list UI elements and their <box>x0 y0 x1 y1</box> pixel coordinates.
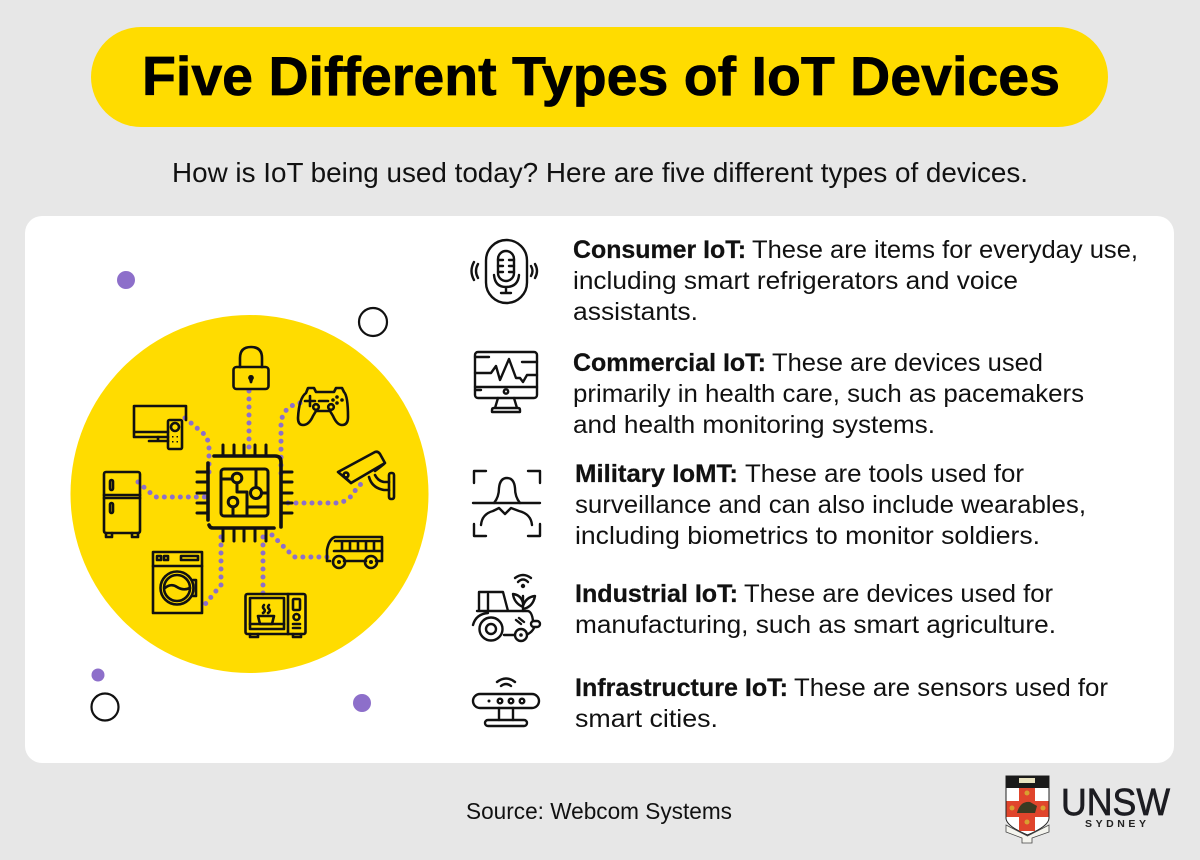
icon: refrigerator <box>104 472 140 537</box>
text: Consumer IoT <box>573 236 1138 326</box>
yellow circle <box>70 315 428 673</box>
item: Commercial IoT <box>475 349 1084 439</box>
decorative purple and outlined dots <box>92 271 387 720</box>
icon: smart tractor <box>473 575 540 641</box>
text: Military IoMT: Military IoMT: <box>575 460 738 488</box>
text: Infrastructure IoT: These are sensors used for <box>794 674 1108 702</box>
text: Industrial IoT: These are devices used for <box>744 580 1053 608</box>
item: Consumer IoT <box>472 236 1138 326</box>
icon: security camera <box>338 452 394 499</box>
text: Commercial IoT <box>573 349 1084 439</box>
title banner: Five Different Types of IoT Devices <box>142 45 1060 107</box>
text: Consumer IoT: assistants. <box>573 298 698 326</box>
logo: UNSW Sydney: UNSW <box>1061 782 1170 824</box>
icon: bus <box>327 537 382 568</box>
illustration: IoT chip network <box>70 271 428 720</box>
icon: microwave oven <box>246 594 306 637</box>
text: Consumer IoT: Consumer IoT: <box>573 236 746 264</box>
icon: television and remote <box>134 406 186 449</box>
item: Military IoMT <box>473 460 1086 550</box>
text: Military IoMT: including biometrics to monitor soldiers. <box>575 522 1040 550</box>
text: Commercial IoT: These are devices used <box>772 349 1043 377</box>
icon: voice assistant microphone <box>472 240 537 303</box>
item: Infrastructure IoT <box>473 674 1108 733</box>
text: Industrial IoT: Industrial IoT: <box>575 580 738 608</box>
icon: biometric face scan <box>473 471 540 536</box>
text: Military IoMT: These are tools used for <box>745 460 1024 488</box>
subtitle: How is IoT being used today? Here are five different types of devices. <box>172 157 1028 188</box>
icon: washing machine <box>153 552 202 613</box>
source note: Source: Webcom Systems <box>466 798 732 824</box>
text: Infrastructure IoT <box>575 674 1108 733</box>
icon: game controller <box>298 388 348 425</box>
item: Industrial IoT <box>473 575 1056 641</box>
logo: crest <box>1006 776 1049 843</box>
dotted connectors <box>138 391 364 608</box>
icon: smart city sensor <box>473 678 539 726</box>
text: Military IoMT <box>575 460 1086 550</box>
text: Infrastructure IoT: smart cities. <box>575 705 718 733</box>
text: Commercial IoT: primarily in health care, such as pacemakers <box>573 380 1084 408</box>
icon: padlock <box>234 347 268 389</box>
text: Consumer IoT: including smart refrigerators and voice <box>573 267 1018 295</box>
icon: microchip <box>197 445 292 541</box>
title banner <box>91 27 1108 127</box>
text: Commercial IoT: and health monitoring systems. <box>573 411 935 439</box>
text: Military IoMT: surveillance and can also include wearables, <box>575 491 1086 519</box>
icon: health monitor <box>475 352 537 412</box>
logo: UNSW Sydney: SYDNEY <box>1085 818 1146 830</box>
text: Industrial IoT: manufacturing, such as smart agriculture. <box>575 611 1056 639</box>
text: Industrial IoT <box>575 580 1056 639</box>
text: Commercial IoT: Commercial IoT: <box>573 349 766 377</box>
text: Consumer IoT: These are items for everyday use, <box>752 236 1138 264</box>
panel: white content card <box>25 216 1174 763</box>
text: Infrastructure IoT: Infrastructure IoT: <box>575 674 788 702</box>
logo: UNSW Sydney <box>1006 776 1170 843</box>
